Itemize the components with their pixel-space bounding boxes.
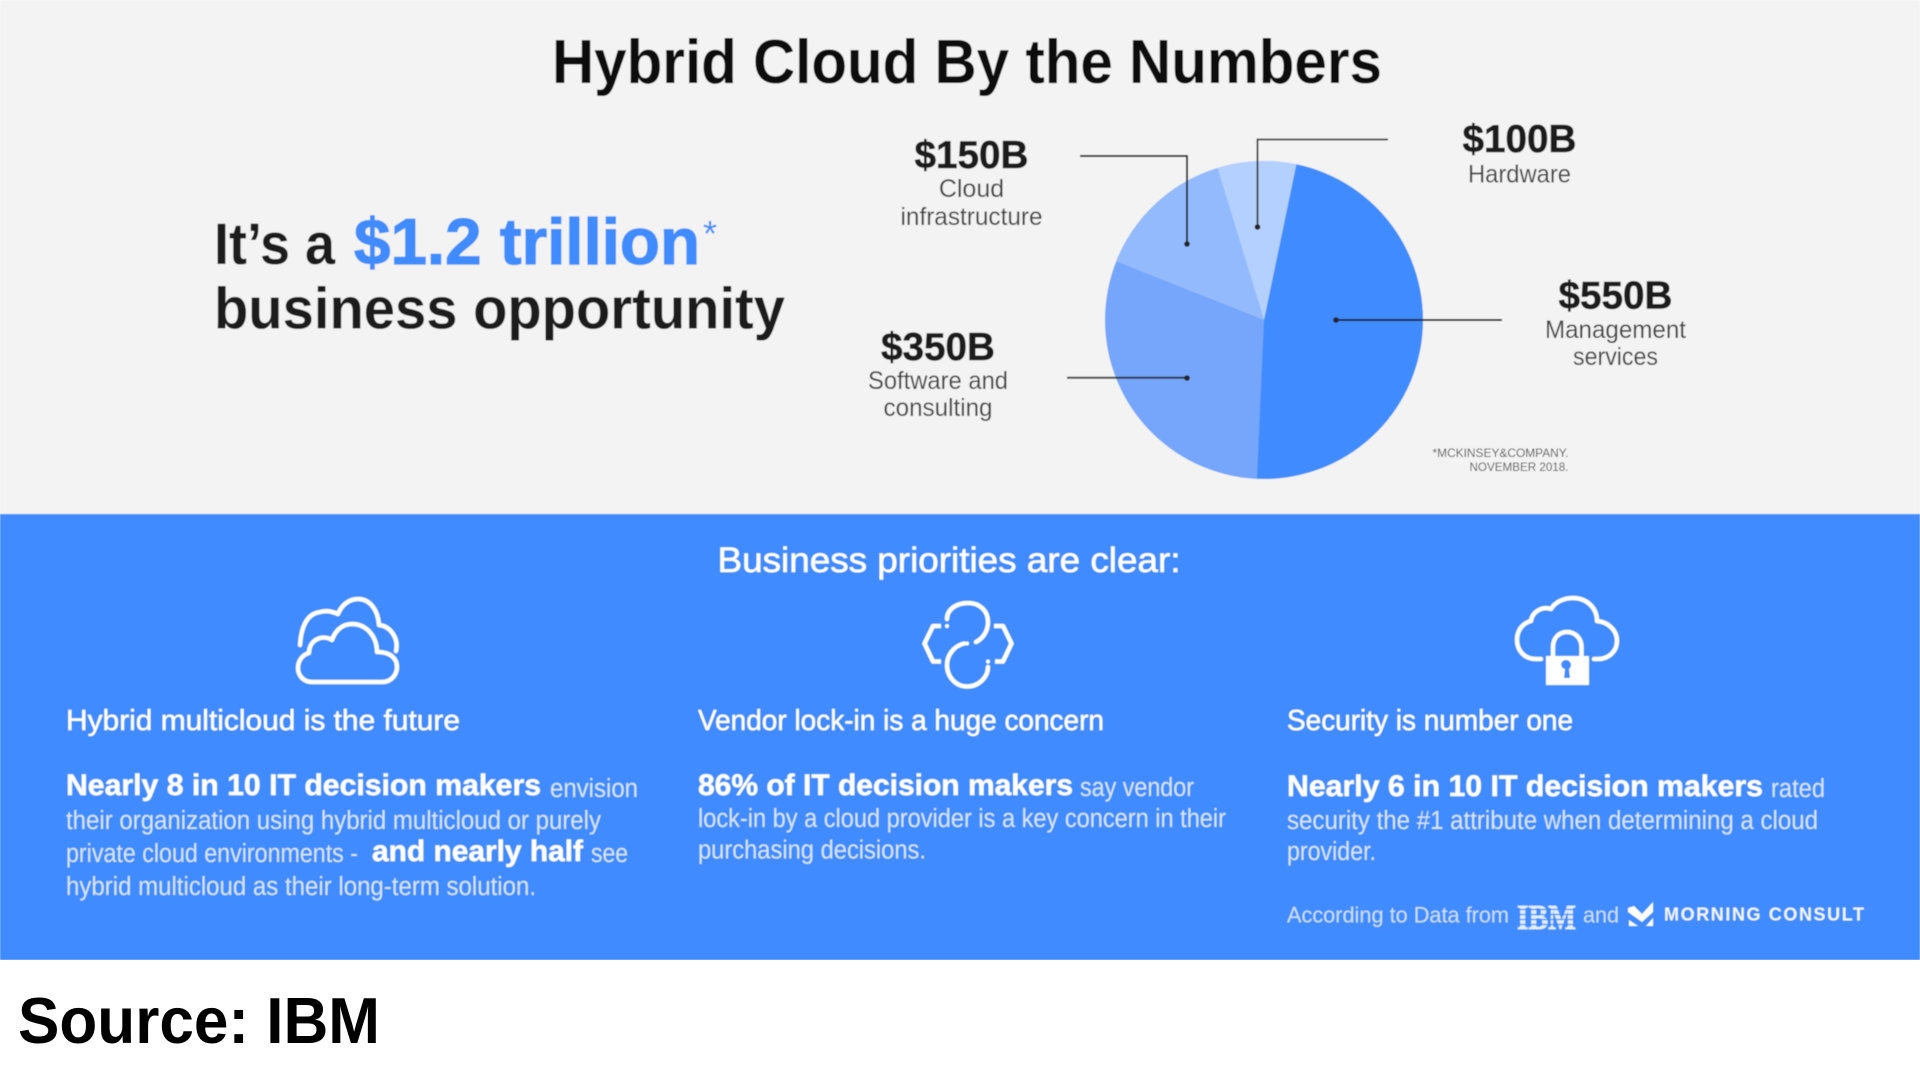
body text: and nearly half (372, 835, 584, 868)
attribution: IBM and Morning Consult (1287, 898, 1864, 937)
title: Hybrid Cloud By the Numbers (552, 28, 1382, 97)
callout: hardware: Hardware (1468, 160, 1571, 188)
headline: business opportunity: business opportunity (214, 276, 785, 342)
icon: two clouds (298, 599, 397, 682)
column: security (1287, 598, 1825, 866)
logo: Morning Consult mark (1628, 902, 1653, 926)
column: vendor lock-in (698, 603, 1226, 864)
attribution: IBM and Morning Consult: According to Data from (1287, 902, 1509, 928)
subheading: Vendor lock-in is a huge concern (698, 705, 1104, 737)
callout: software and consulting: Software and (868, 367, 1008, 395)
logo: IBM: IBM (1517, 898, 1576, 937)
callout: cloud infrastructure (900, 134, 1190, 247)
callout: cloud infrastructure: Cloud (939, 175, 1004, 203)
body text: lock-in by a cloud provider is a key concern in their (698, 805, 1226, 833)
callout: hardware (1255, 118, 1576, 230)
body text: Nearly 8 in 10 IT decision makers (66, 769, 541, 802)
body text: provider. (1287, 838, 1376, 866)
subheading: Security is number one (1287, 705, 1573, 737)
source credit: Source: IBM (18, 984, 380, 1057)
headline: business opportunity (214, 205, 785, 342)
panel: business priorities (0, 514, 1920, 960)
callout: software and consulting: $350B (881, 326, 995, 369)
body text: security the #1 attribute when determining a cloud (1287, 807, 1818, 835)
body text: 86% of IT decision makers (698, 769, 1073, 802)
callout: management services: services (1573, 343, 1658, 371)
body text: envision (550, 775, 638, 803)
callout: hardware: $100B (1462, 118, 1576, 161)
body text (1287, 770, 1825, 866)
body text: rated (1771, 775, 1825, 803)
body text: their organization using hybrid multicloud or purely (66, 807, 601, 835)
source note: McKinsey (1432, 446, 1568, 474)
attribution: IBM and Morning Consult: and (1583, 902, 1619, 928)
body text (698, 769, 1226, 864)
callout: management services (1333, 274, 1686, 371)
headline: business opportunity: $1.2 trillion (354, 205, 700, 278)
body text: say vendor (1080, 774, 1194, 802)
panel: market opportunity (0, 0, 1920, 514)
column: hybrid multicloud (66, 599, 638, 901)
callout: cloud infrastructure: $150B (914, 134, 1028, 177)
heading: business priorities: Business priorities are clear: (718, 541, 1180, 580)
source note: McKinsey: NOVEMBER 2018. (1470, 460, 1568, 474)
headline: business opportunity: * (703, 213, 717, 254)
callout: management services: $550B (1558, 274, 1672, 318)
subheading: Hybrid multicloud is the future (66, 705, 460, 737)
source note: McKinsey: *MCKINSEY&COMPANY. (1432, 446, 1568, 460)
body text (66, 769, 638, 901)
icon: cloud with padlock (1517, 598, 1617, 685)
callout: software and consulting (868, 326, 1190, 422)
callout: management services: Management (1545, 316, 1686, 344)
body text: private cloud environments - (66, 840, 358, 868)
body text: Nearly 6 in 10 IT decision makers (1287, 770, 1763, 803)
callout: software and consulting: consulting (884, 394, 992, 422)
callout: cloud infrastructure: infrastructure (900, 203, 1042, 231)
headline: business opportunity: It’s a (214, 212, 336, 277)
body text: see (591, 840, 628, 868)
attribution: IBM and Morning Consult: MORNING CONSULT (1664, 904, 1864, 924)
pie chart (1105, 161, 1423, 479)
body text: hybrid multicloud as their long-term solution. (66, 873, 536, 901)
body text: purchasing decisions. (698, 836, 926, 864)
icon: chain links (924, 603, 1012, 686)
